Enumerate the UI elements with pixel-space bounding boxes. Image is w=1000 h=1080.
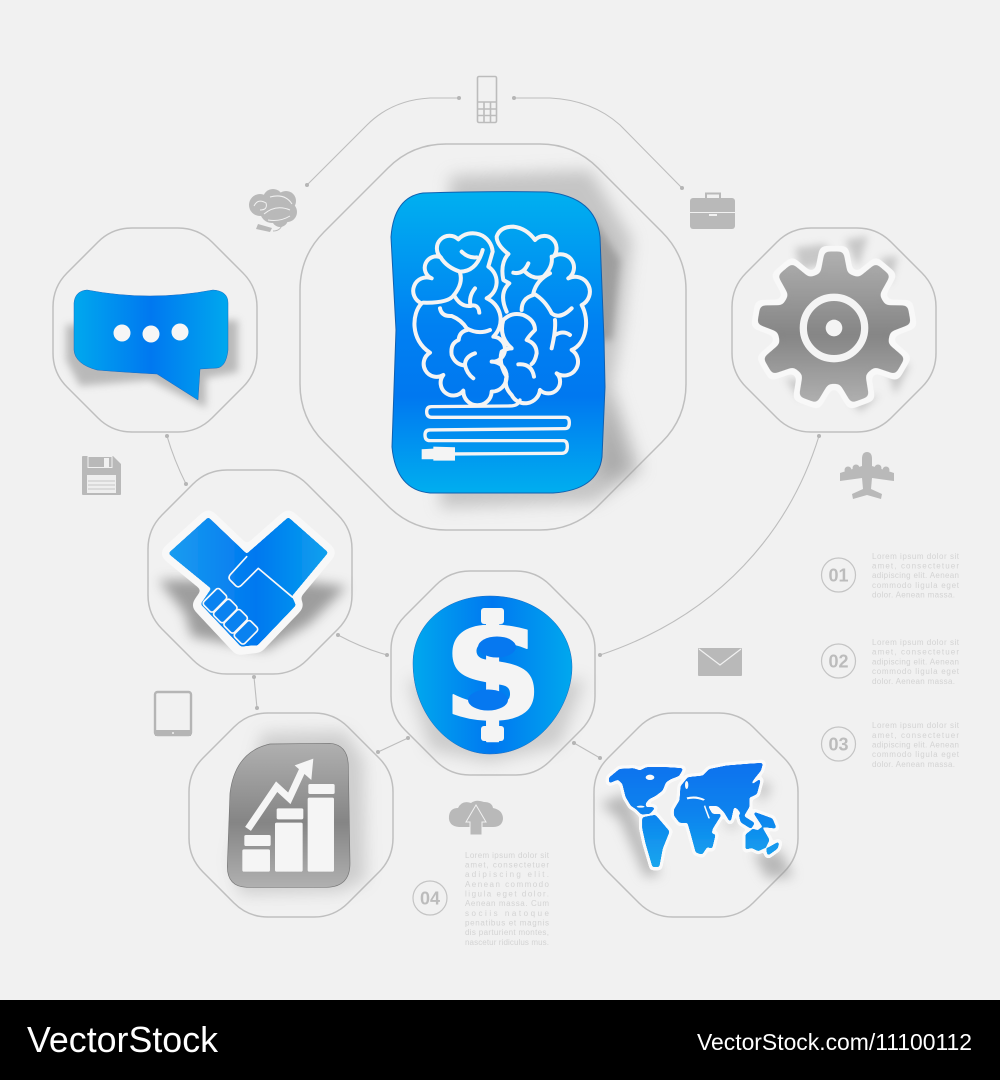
callout: 04: Lorem ipsum dolor sit [465, 851, 550, 860]
panel: central brain octagon [300, 144, 686, 530]
icon: world map [610, 764, 778, 866]
callout: 01: amet, consectetuer [872, 562, 959, 570]
icon: briefcase [690, 194, 735, 229]
callout: 02: 02 [828, 652, 849, 672]
callout: 03: Lorem ipsum dolor sit [872, 721, 960, 730]
footer band [0, 1000, 1000, 1080]
icon: small brain [249, 189, 297, 232]
icon: speech bubble [74, 290, 228, 400]
icon: gear [757, 252, 911, 403]
callout: 04: Aenean massa. Cum [465, 899, 549, 908]
callout: 04: penatibus et magnis [465, 918, 549, 928]
icon: bar chart card [227, 743, 350, 887]
callout: 04: dis parturient montes, [465, 928, 549, 937]
icon: mobile phone [478, 76, 496, 122]
icon: airplane [840, 452, 894, 499]
handshake shadow [158, 580, 347, 650]
icon: dollar coin [413, 585, 572, 755]
callout: 03: 03 [828, 734, 849, 754]
callout: 04: adipiscing elit. [465, 870, 549, 879]
callout: 04 [413, 851, 550, 947]
callout: 03: commodo ligula eget [872, 750, 960, 759]
icon: brain with usb cable [413, 227, 590, 461]
callout: 04: nascetur ridiculus mus. [465, 938, 549, 947]
footer brand: VectorStock [27, 1019, 219, 1060]
callout: 04: amet, consectetuer [465, 860, 549, 870]
speech bubble shadow [66, 320, 238, 408]
callout: 01: commodo ligula eget [872, 581, 960, 590]
callout: 02: adipiscing elit. Aenean [872, 658, 959, 666]
callout: 04: Aenean commodo [465, 880, 550, 889]
callout: 03: adipiscing elit. Aenean [872, 740, 959, 750]
chart shadow [232, 731, 366, 894]
callout: 04: 04 [420, 888, 440, 908]
brain card [391, 192, 605, 493]
icon: floppy disk [82, 456, 121, 495]
callout: 01 [822, 552, 960, 600]
callout: 04: ligula eget dolor. [465, 890, 549, 898]
dollar shadow [408, 680, 585, 762]
footer url: VectorStock.com/11100112 [697, 1029, 972, 1055]
callout: 01: adipiscing elit. Aenean [872, 571, 959, 580]
panel: chart octagon [189, 713, 393, 917]
panel: speech bubble octagon [53, 228, 257, 432]
panel: gear octagon [732, 228, 936, 432]
icon: cloud upload [449, 801, 503, 835]
callout: 01: Lorem ipsum dolor sit [872, 552, 960, 561]
connector lines [165, 96, 821, 760]
icon: handshake [171, 519, 326, 646]
map shadow [600, 780, 793, 878]
callout: 03 [822, 721, 960, 769]
gear shadow [785, 236, 910, 412]
callout: 03: amet, consectetuer [872, 731, 959, 740]
callout: 02: commodo ligula eget [872, 667, 960, 676]
icon: tablet [155, 692, 191, 736]
callout: 02 [822, 638, 960, 686]
panel: dollar octagon [391, 571, 595, 775]
icon: envelope [698, 648, 742, 676]
callout: 02: Lorem ipsum dolor sit [872, 638, 960, 647]
icon: dollar coin: $ [442, 585, 543, 755]
callout: 02: amet, consectetuer [872, 648, 959, 656]
callout: 02: dolor. Aenean massa. [872, 677, 955, 686]
panel: world map octagon [594, 713, 798, 917]
brain card shadow [440, 170, 642, 508]
callout: 04: sociis natoque [465, 909, 550, 918]
panel: handshake octagon [148, 470, 352, 674]
callout: 03: dolor. Aenean massa. [872, 760, 955, 769]
callout: 01: 01 [828, 566, 849, 586]
callout: 01: dolor. Aenean massa. [872, 590, 955, 600]
